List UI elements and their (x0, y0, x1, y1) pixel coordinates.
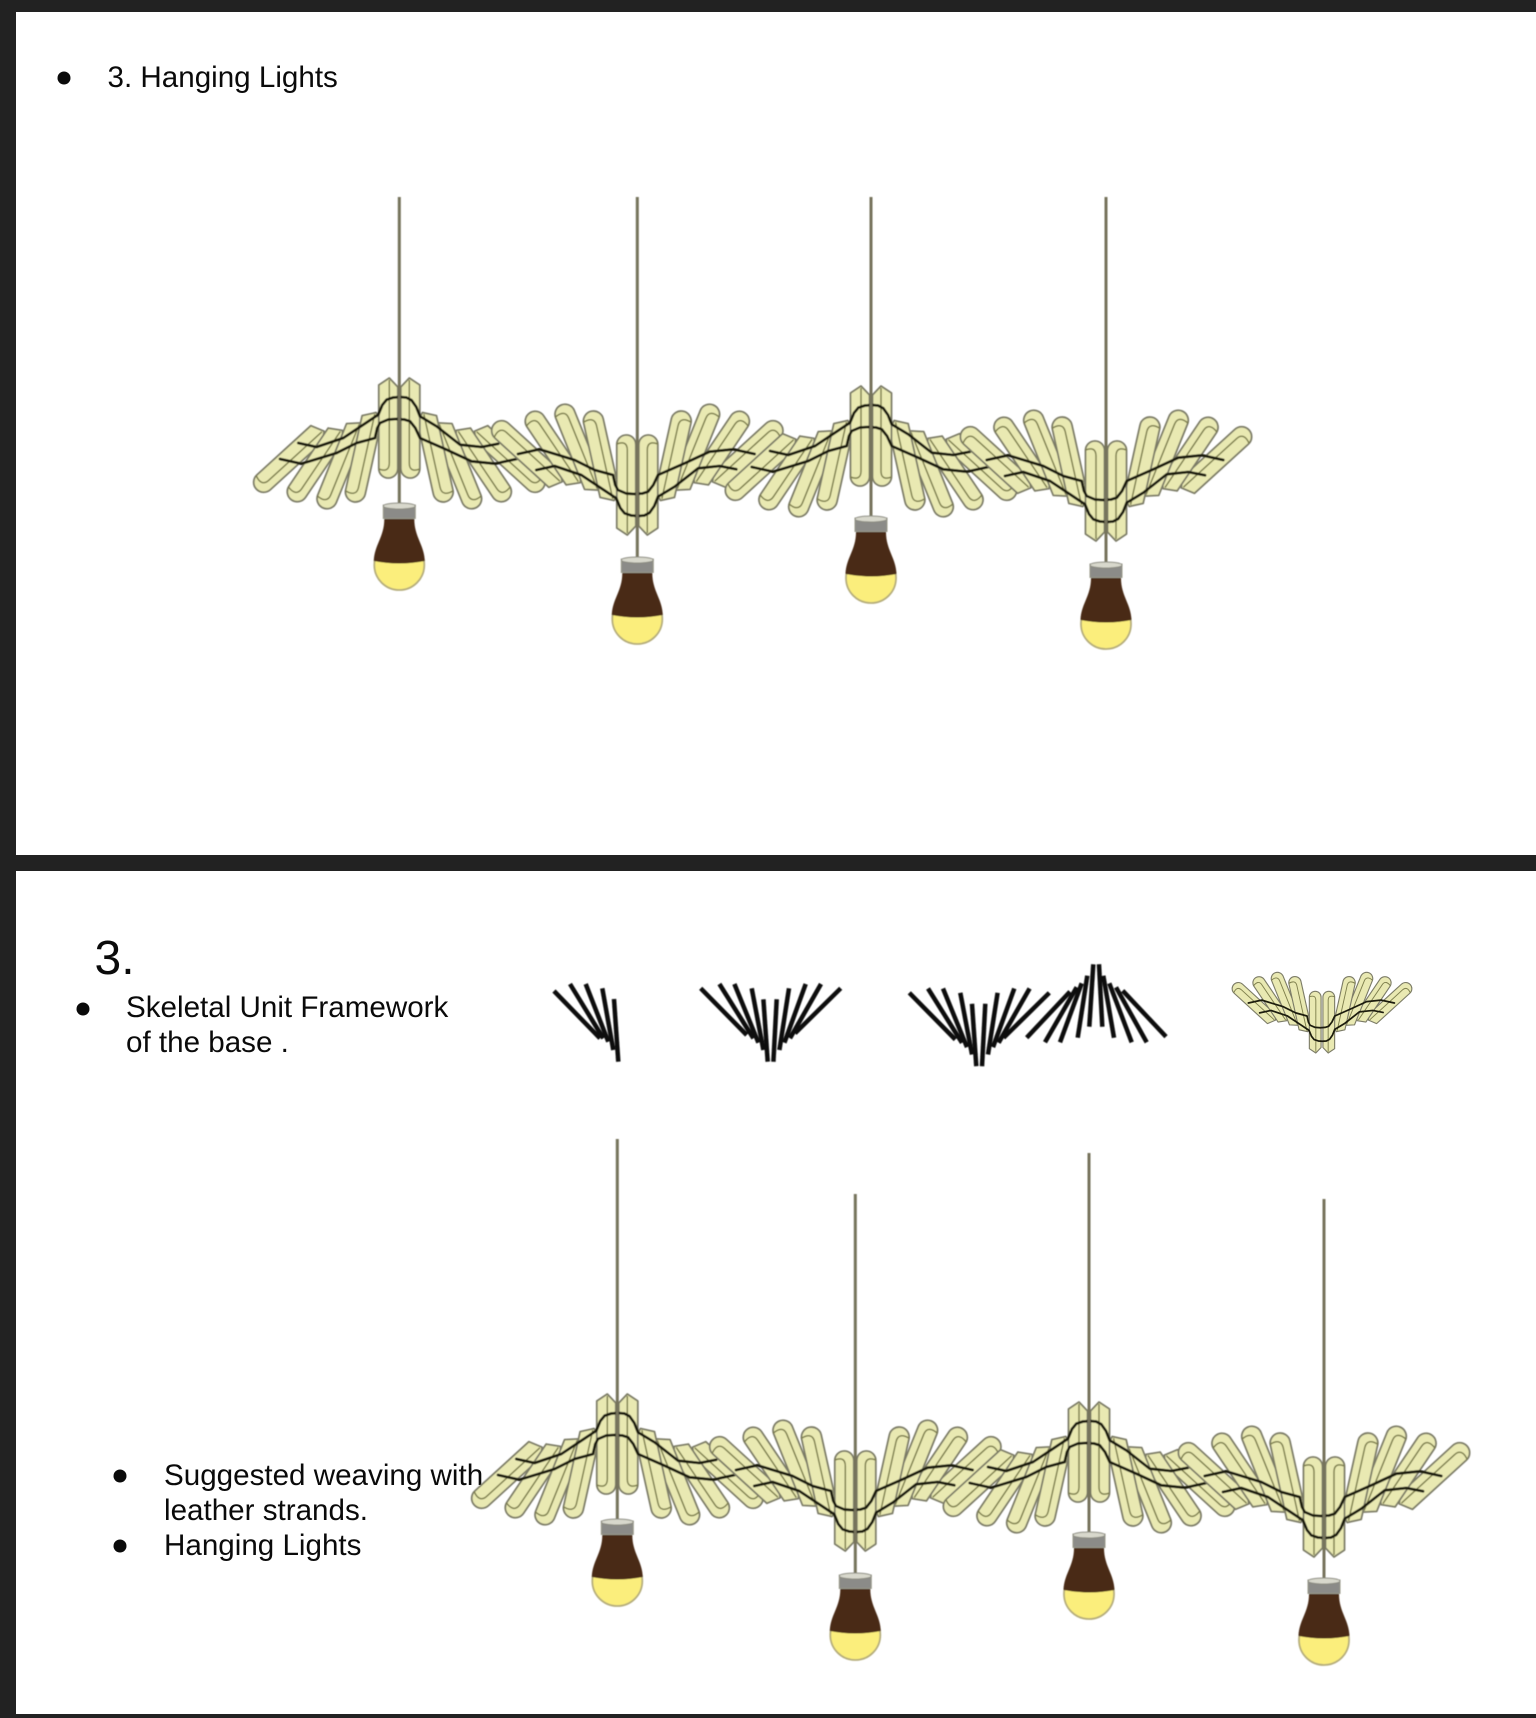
wire 4 (1104, 197, 1108, 565)
wire 2 (854, 1194, 857, 1576)
bulb 4 (1080, 562, 1132, 649)
wing unit 3 (peak) (721, 386, 1021, 520)
wire 1 (398, 197, 401, 506)
text: skeletal unit framework: of the base . (126, 1026, 289, 1059)
panel: top slide (16, 12, 1536, 855)
wire 3 (870, 197, 872, 519)
wire 1 (616, 1139, 619, 1522)
wing unit 2 (valley) (706, 1417, 1005, 1551)
bulb 2 (612, 557, 663, 644)
heading: hanging lights bullet: 3. Hanging Lights (108, 61, 338, 94)
text: weaving and hanging lights bullets: Suggested weaving with (164, 1459, 483, 1492)
bulb 1 (374, 503, 425, 590)
wing unit 1 (peak) (250, 378, 549, 512)
wing unit 4 (valley) (1174, 1423, 1474, 1557)
section number: 3. (94, 932, 135, 985)
text: weaving and hanging lights bullets (114, 1459, 483, 1562)
panel: bottom slide (16, 871, 1536, 1714)
text: weaving and hanging lights bullets: Hanging Lights (164, 1529, 361, 1562)
bulb 3 (1064, 1532, 1114, 1619)
wing unit 1 (peak) (468, 1394, 767, 1528)
skeleton: one half of framework (554, 984, 618, 1062)
bulb 4 (1298, 1578, 1350, 1665)
wing unit 4 (valley) (956, 407, 1256, 541)
skeleton: V framework joined to inverted framework (909, 964, 1166, 1066)
wing unit 3 (peak) (939, 1402, 1239, 1536)
wire 2 (636, 197, 639, 560)
text: skeletal unit framework: Skeletal Unit Framework (126, 991, 449, 1024)
wire 3 (1088, 1153, 1090, 1535)
small finished woven unit (1230, 970, 1414, 1053)
illustration: top row of hanging lights (250, 197, 1256, 649)
wing unit 2 (valley) (488, 401, 787, 535)
wire 4 (1322, 1199, 1326, 1581)
skeleton: full V framework (701, 984, 841, 1062)
bulb 2 (830, 1573, 881, 1660)
text: weaving and hanging lights bullets: leather strands. (164, 1494, 368, 1527)
bulb 1 (592, 1519, 643, 1606)
text: skeletal unit framework (76, 991, 449, 1059)
illustration: bottom row of hanging lights (468, 1139, 1474, 1665)
bulb 3 (846, 516, 896, 603)
